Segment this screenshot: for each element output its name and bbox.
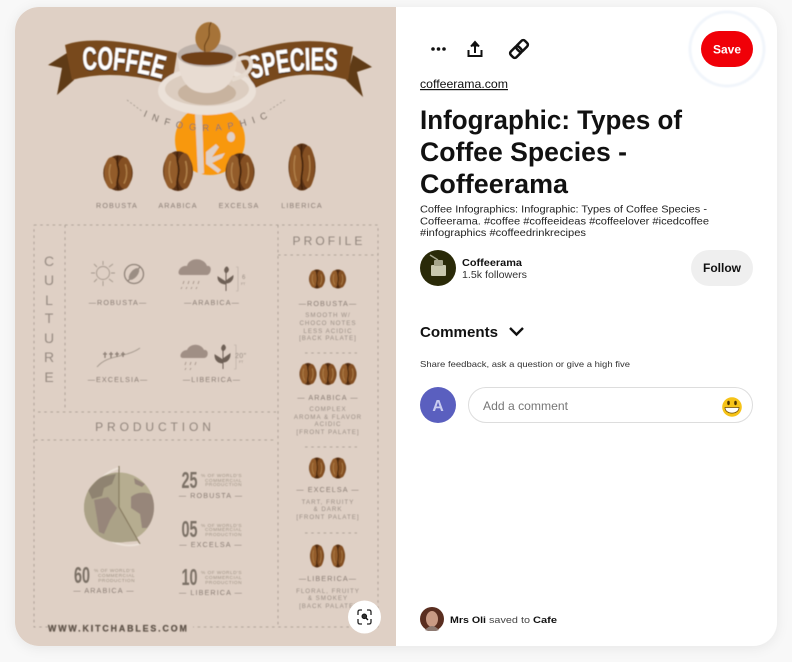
icon: copy link <box>509 39 529 59</box>
follow button <box>691 250 753 286</box>
profile: arabica: ACIDIC <box>315 421 341 428</box>
heading: production: PRODUCTION <box>95 420 215 434</box>
stat: liberica 10% <box>178 568 242 596</box>
icon: share upload <box>468 42 482 56</box>
pin title: Coffee Species - <box>420 137 627 167</box>
saved to attribution: saved to <box>489 615 530 626</box>
stat: excelsa 05%: COMMERCIAL <box>205 527 242 533</box>
stat: excelsa 05%: PRODUCTION <box>205 532 242 538</box>
heading: culture: U <box>44 272 54 288</box>
stat: liberica 10%: % OF WORLD'S <box>201 570 242 576</box>
profile: robusta: LESS ACIDIC <box>303 328 353 335</box>
stat: arabica 60%: % OF WORLD'S <box>94 568 135 574</box>
heading: culture: L <box>45 292 53 308</box>
source link: coffeerama.com <box>420 77 508 91</box>
heading: profile: PROFILE <box>292 234 366 248</box>
banner: coffee ribbon <box>48 40 178 96</box>
profile: arabica: COMPLEX <box>309 406 347 413</box>
profile: robusta: [BACK PALATE] <box>299 335 357 342</box>
icon: arabica rain cloud and plant: FT <box>241 282 246 286</box>
banner text: coffee <box>82 46 168 80</box>
follow button: Follow <box>703 261 742 275</box>
creator avatar <box>420 250 456 286</box>
profile: excelsa <box>296 458 360 533</box>
profile: liberica: & SMOKEY <box>308 595 348 602</box>
pin description: Coffeerama. #coffee #coffeeideas #coffeelover #icedcoffee <box>420 216 709 228</box>
save button: Save <box>713 42 741 56</box>
stat: liberica 10%: COMMERCIAL <box>205 575 242 581</box>
profile: liberica: FLORAL, FRUITY <box>296 588 360 595</box>
saver avatar <box>420 607 444 631</box>
user avatar: A <box>432 398 444 415</box>
banner: species ribbon <box>238 40 372 98</box>
profile: liberica: [BACK PALATE] <box>299 603 357 610</box>
beans row with species names <box>96 144 323 210</box>
icon: arabica rain cloud and plant <box>179 259 246 291</box>
heading: culture <box>44 253 54 385</box>
profile: robusta: CHOCO NOTES <box>299 320 357 327</box>
stat: arabica 60%: 60 <box>74 562 90 588</box>
icon: liberica rain cloud and plant: FT <box>239 360 244 364</box>
comment input: Add a comment <box>483 399 569 413</box>
beans row with species names: ARABICA <box>158 201 198 210</box>
globe production pie <box>84 466 156 545</box>
icon: liberica rain cloud and plant: 20" <box>235 353 247 360</box>
stat: liberica 10%: 10 <box>182 564 198 590</box>
heading: culture: C <box>44 253 54 269</box>
stat: arabica 60%: COMMERCIAL <box>98 573 135 579</box>
icon: chevron down <box>510 328 523 334</box>
icon: smiley emoji <box>722 397 742 417</box>
pin title <box>420 105 683 199</box>
user avatar <box>420 387 456 423</box>
icon: sun <box>91 261 115 286</box>
beans row with species names: ROBUSTA <box>96 201 138 210</box>
heading: culture: E <box>44 369 54 385</box>
stat: excelsa 05%: % OF WORLD'S <box>201 523 242 529</box>
profile: excelsa: TART, FRUITY <box>302 499 354 506</box>
pin description: Coffee Infographics: Infographic: Types of Coffee Species - <box>420 204 707 216</box>
label: excelsia culture: —EXCELSIA— <box>88 375 148 384</box>
label: robusta culture: —ROBUSTA— <box>89 298 147 307</box>
stat: robusta 25%: % OF WORLD'S <box>201 473 242 479</box>
icon: no sun <box>124 264 144 284</box>
profile: excelsa: [FRONT PALATE] <box>296 514 360 521</box>
heading: culture: R <box>44 349 54 365</box>
stat: arabica 60% <box>73 566 135 594</box>
pin description: #infographics #coffeedrinkrecipes <box>420 228 586 239</box>
icon: more options <box>431 47 446 51</box>
saved to attribution: Mrs Oli <box>450 615 486 626</box>
icon: coffee cup on saucer <box>158 20 256 115</box>
stat: arabica 60%: — ARABICA — <box>73 586 135 595</box>
profile: liberica <box>296 544 360 610</box>
label: liberica culture: —LIBERICA— <box>183 375 241 384</box>
stat: robusta 25%: COMMERCIAL <box>205 478 242 484</box>
profile: liberica: —LIBERICA— <box>299 574 357 583</box>
stat: robusta 25%: — ROBUSTA — <box>179 491 243 500</box>
icon: excelsia hillside trees <box>97 348 140 367</box>
label: arabica culture: —ARABICA— <box>184 298 240 307</box>
infographic subtitle <box>126 100 286 132</box>
profile: arabica: AROMA & FLAVOR <box>294 414 362 421</box>
stat: excelsa 05%: 05 <box>182 516 198 542</box>
stat: excelsa 05% <box>179 520 242 548</box>
infographic subtitle: INFOGRAPHIC <box>144 110 268 132</box>
profile: robusta: —ROBUSTA— <box>299 299 357 308</box>
stat: robusta 25%: PRODUCTION <box>205 482 242 488</box>
icon: arabica rain cloud and plant: 6 <box>242 275 246 281</box>
heading: culture: T <box>45 310 54 326</box>
banner text: coffee: COFFEE <box>82 46 168 80</box>
saved to attribution: Cafe <box>533 615 557 626</box>
follower count: 1.5k followers <box>462 269 527 281</box>
banner text: coffee: COFFEE <box>84 50 166 80</box>
saved to attribution <box>450 615 557 626</box>
comments prompt: Share feedback, ask a question or give a high five <box>420 359 630 369</box>
icon: visual search button <box>348 600 381 634</box>
creator name: Coffeerama <box>462 257 522 269</box>
profile: excelsa: — EXCELSA — <box>296 485 360 494</box>
pin title: Infographic: Types of <box>420 105 683 135</box>
pin description <box>420 204 709 239</box>
stat: arabica 60%: PRODUCTION <box>98 578 135 584</box>
beans row with species names: LIBERICA <box>281 201 323 210</box>
stat: excelsa 05%: — EXCELSA — <box>179 540 243 549</box>
stat: liberica 10%: — LIBERICA — <box>179 588 243 597</box>
banner text: species: SPECIES <box>248 46 338 79</box>
profile: arabica <box>294 363 362 447</box>
stat: robusta 25%: 25 <box>182 467 198 493</box>
profile: arabica: — ARABICA — <box>297 393 359 402</box>
save button <box>701 31 753 67</box>
heading: culture: U <box>44 330 54 346</box>
banner text: species <box>248 46 338 80</box>
panel: coffee species infographic image <box>15 7 396 646</box>
banner text: species: SPECIES <box>252 52 337 80</box>
icon: liberica rain cloud and plant <box>180 345 247 370</box>
comments heading: Comments <box>420 324 498 341</box>
orange logo circle <box>175 105 245 175</box>
profile: robusta: SMOOTH W/ <box>305 312 351 319</box>
pin title: Coffeerama <box>420 169 569 199</box>
comment input <box>468 388 752 422</box>
beans row with species names: EXCELSA <box>219 201 259 210</box>
stat: robusta 25% <box>178 472 242 498</box>
profile: excelsa: & DARK <box>313 506 343 513</box>
profile: robusta <box>299 270 357 353</box>
save button focus ring <box>690 12 764 86</box>
section frames <box>34 225 378 627</box>
website footer text: WWW.KITCHABLES.COM <box>48 624 189 634</box>
stat: liberica 10%: PRODUCTION <box>205 580 242 586</box>
profile: arabica: [FRONT PALATE] <box>296 429 360 436</box>
